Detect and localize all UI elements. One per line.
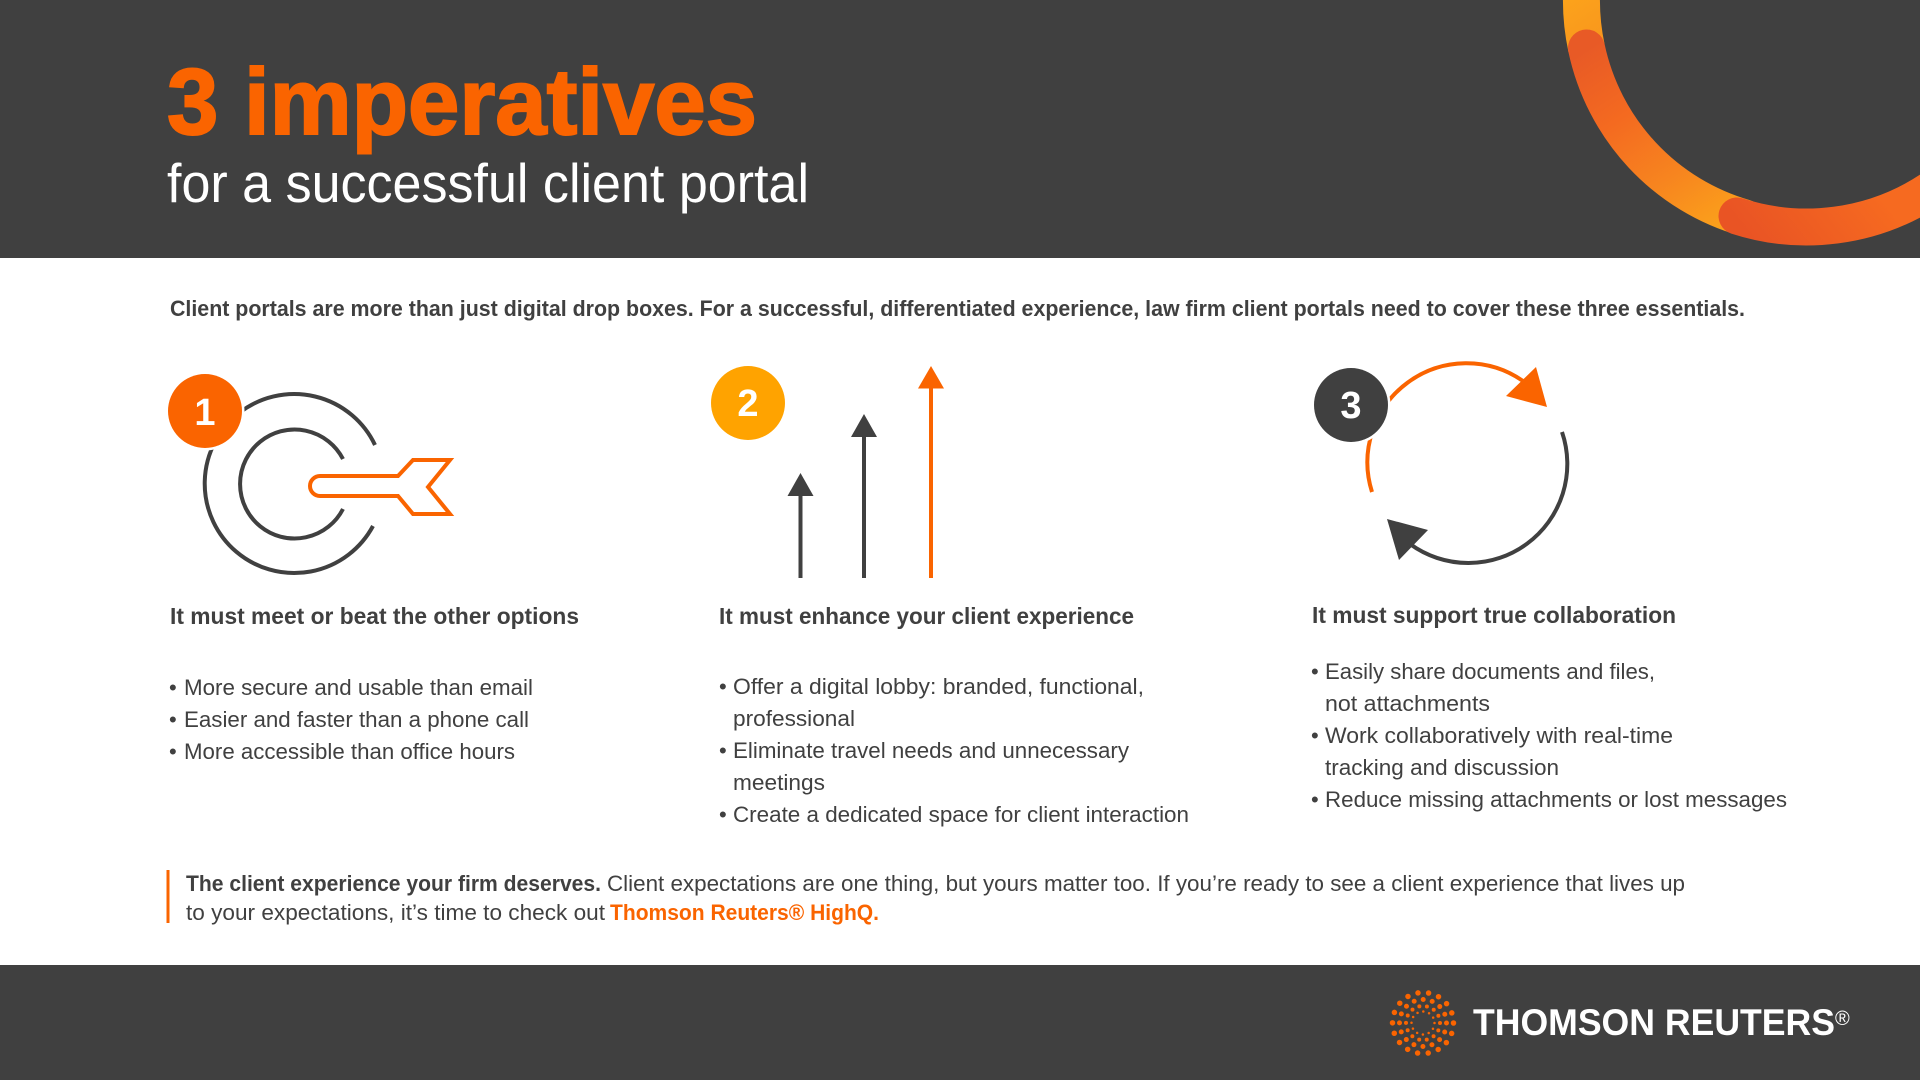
bullet list 2: meetings	[733, 770, 825, 795]
header band	[0, 0, 1920, 258]
intro text: Client portals are more than just digital drop boxes. For a successful, differentiated experience, law firm client portals need to cover these three essentials.	[170, 296, 1745, 321]
callout: Thomson Reuters® HighQ.	[610, 900, 879, 925]
bullet list 1: •	[169, 739, 177, 764]
callout: Client expectations are one thing, but yours matter too. If you’re ready to see a client experience that lives up	[607, 871, 1685, 896]
heading 3: It must support true collaboration	[1312, 602, 1676, 628]
bullet list 1: More accessible than office hours	[184, 739, 515, 764]
bullet list 2: Eliminate travel needs and unnecessary	[733, 738, 1129, 763]
bullet list 3: Work collaboratively with real-time	[1325, 723, 1673, 748]
panel: imperative 2	[711, 366, 1189, 827]
bullet list 3: tracking and discussion	[1325, 755, 1559, 780]
logo: dotted globe	[1392, 992, 1454, 1054]
subtitle: for a successful client portal	[167, 152, 809, 214]
bullet list 1: •	[169, 707, 177, 732]
bullet list 3: Reduce missing attachments or lost messages	[1325, 787, 1787, 812]
number badge 2	[711, 366, 785, 440]
panel: imperative 1	[166, 372, 579, 764]
bullet list 2: Create a dedicated space for client interaction	[733, 802, 1189, 827]
number badge 2: 2	[737, 383, 759, 425]
number badge 3	[1312, 366, 1390, 444]
number badge 3: 3	[1340, 385, 1362, 427]
bullet list 2: •	[719, 802, 727, 827]
callout: The client experience your firm deserves.	[186, 871, 601, 896]
bullet list 3: •	[1311, 723, 1319, 748]
logo: wordmark: THOMSON REUTERS	[1473, 1002, 1835, 1043]
logo: registered mark: ®	[1835, 1008, 1850, 1030]
bullet list 3	[1311, 659, 1787, 812]
bullet list 1: •	[169, 675, 177, 700]
bullet list 1: More secure and usable than email	[184, 675, 533, 700]
number badge 1	[166, 372, 244, 450]
bullet list 1	[169, 675, 533, 764]
heading 2: It must enhance your client experience	[719, 603, 1134, 629]
footer band	[0, 965, 1920, 1080]
callout	[166, 870, 1685, 925]
bullet list 3: Easily share documents and files,	[1325, 659, 1655, 684]
decorative ring	[1581, 0, 1920, 227]
bullet list 2: Offer a digital lobby: branded, functional,	[733, 674, 1144, 699]
panel: imperative 3	[1311, 363, 1787, 812]
icon: rising arrows	[788, 366, 944, 578]
heading 1: It must meet or beat the other options	[170, 603, 579, 629]
bullet list 3: •	[1311, 787, 1319, 812]
bullet list 2: •	[719, 674, 727, 699]
bullet list 2: •	[719, 738, 727, 763]
bullet list 2	[719, 674, 1189, 827]
number badge 1: 1	[194, 392, 216, 434]
bullet list 2: professional	[733, 706, 855, 731]
bullet list 3: not attachments	[1325, 691, 1490, 716]
icon: collaboration cycle	[1367, 363, 1567, 563]
icon: target and dart	[205, 394, 450, 573]
title: 3 imperatives	[167, 49, 757, 154]
callout: to your expectations, it’s time to check out	[186, 900, 605, 925]
bullet list 1: Easier and faster than a phone call	[184, 707, 529, 732]
bullet list 3: •	[1311, 659, 1319, 684]
